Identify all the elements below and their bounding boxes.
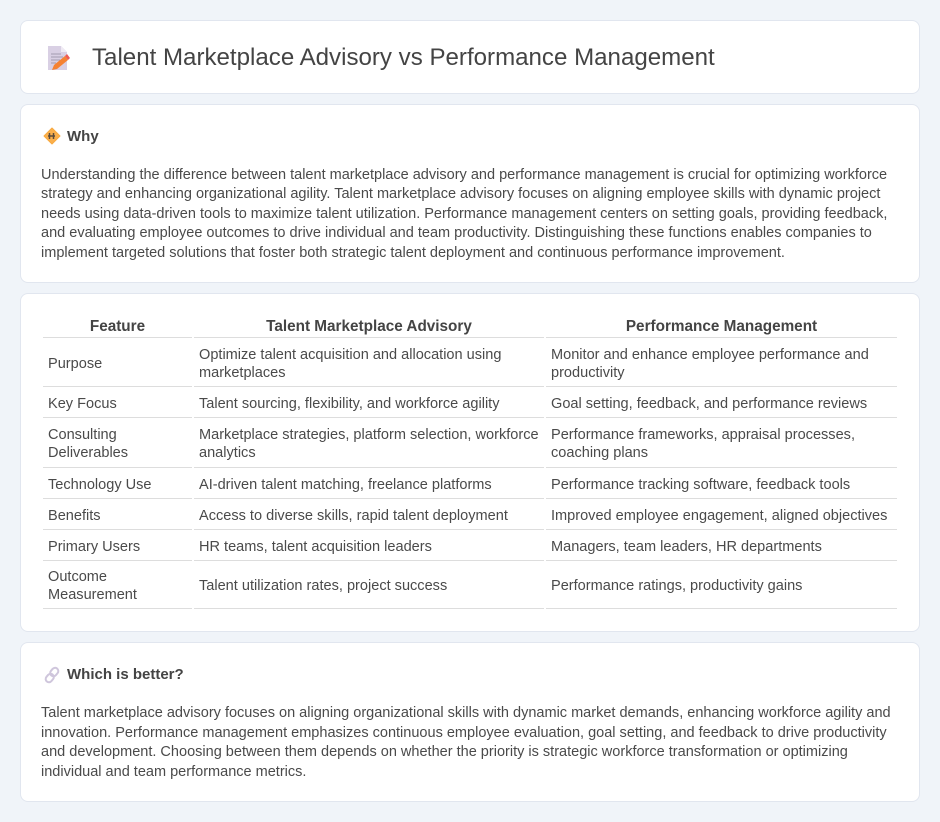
icon: document with pencil (48, 46, 70, 70)
heading: why: Why (67, 128, 99, 145)
comparison table: Performance Management (626, 318, 817, 335)
comparison table: Deliverables (48, 445, 128, 461)
why text block (41, 166, 887, 261)
panel: which is better (20, 642, 920, 802)
comparison table: Performance ratings, productivity gains (551, 578, 802, 594)
comparison table: AI-driven talent matching, freelance platforms (199, 476, 492, 492)
which is better text block: individual and team performance metrics. (41, 764, 306, 780)
which is better text block: innovation. Performance management emphasizes continuous employee evaluation, goal setting, and feedback to drive productivity (41, 725, 887, 741)
comparison table: Benefits (48, 508, 101, 524)
panel: comparison table (20, 293, 920, 632)
panel: why (20, 104, 920, 283)
why text block: Understanding the difference between talent marketplace advisory and performance management is crucial for optimizing workforce (41, 166, 887, 182)
comparison table: Outcome (48, 569, 107, 585)
why text block: and evaluating employee outcomes to drive individual and team productivity. Distinguishing these functions enables companies to (41, 225, 872, 241)
why text block: strategy and enhancing organizational agility. Talent marketplace advisory focuses on aligning employee skills with dynamic project (41, 186, 880, 202)
comparison table: Measurement (48, 587, 137, 603)
comparison table: Purpose (48, 356, 102, 372)
comparison table: Optimize talent acquisition and allocation using (199, 346, 501, 362)
comparison table: Access to diverse skills, rapid talent deployment (199, 508, 508, 524)
comparison table: marketplaces (199, 364, 286, 380)
comparison table: analytics (199, 445, 256, 461)
comparison table: Key Focus (48, 396, 117, 412)
comparison table: HR teams, talent acquisition leaders (199, 538, 432, 554)
comparison table: Consulting (48, 427, 117, 443)
comparison table: productivity (551, 364, 625, 380)
comparison table: Primary Users (48, 538, 140, 554)
icon: chain link (44, 666, 60, 684)
why text block: implement targeted solutions that foster both strategic talent deployment and continuous performance improvement. (41, 245, 785, 261)
comparison table (43, 318, 897, 609)
comparison table: Improved employee engagement, aligned objectives (551, 508, 887, 524)
why text block: needs using data-driven tools to maximize talent utilization. Performance management centers on setting goals, providing feedback, (41, 206, 887, 222)
comparison table: Talent Marketplace Advisory (266, 318, 472, 335)
comparison table: Talent utilization rates, project success (199, 578, 447, 594)
which is better text block (41, 705, 891, 780)
which is better text block: and development. Choosing between them depends on whether the priority is strategic workforce transformation or optimizing (41, 744, 848, 760)
header card (20, 20, 920, 94)
icon: construction diamond (44, 128, 60, 144)
comparison table: Feature (90, 318, 145, 335)
comparison table: Managers, team leaders, HR departments (551, 538, 822, 554)
comparison table: Marketplace strategies, platform selection, workforce (199, 427, 539, 443)
comparison table: Performance frameworks, appraisal processes, (551, 427, 855, 443)
comparison table: Goal setting, feedback, and performance reviews (551, 396, 867, 412)
comparison table: Technology Use (48, 476, 152, 492)
which is better text block: Talent marketplace advisory focuses on aligning organizational skills with dynamic market demands, enhancing workforce agility and (41, 705, 891, 721)
title: Talent Marketplace Advisory vs Performance Management (92, 44, 715, 71)
comparison table: Monitor and enhance employee performance and (551, 346, 869, 362)
comparison table: Performance tracking software, feedback tools (551, 476, 850, 492)
comparison table: coaching plans (551, 445, 648, 461)
heading: which is better: Which is better? (67, 666, 184, 683)
comparison table: Talent sourcing, flexibility, and workforce agility (199, 396, 500, 412)
